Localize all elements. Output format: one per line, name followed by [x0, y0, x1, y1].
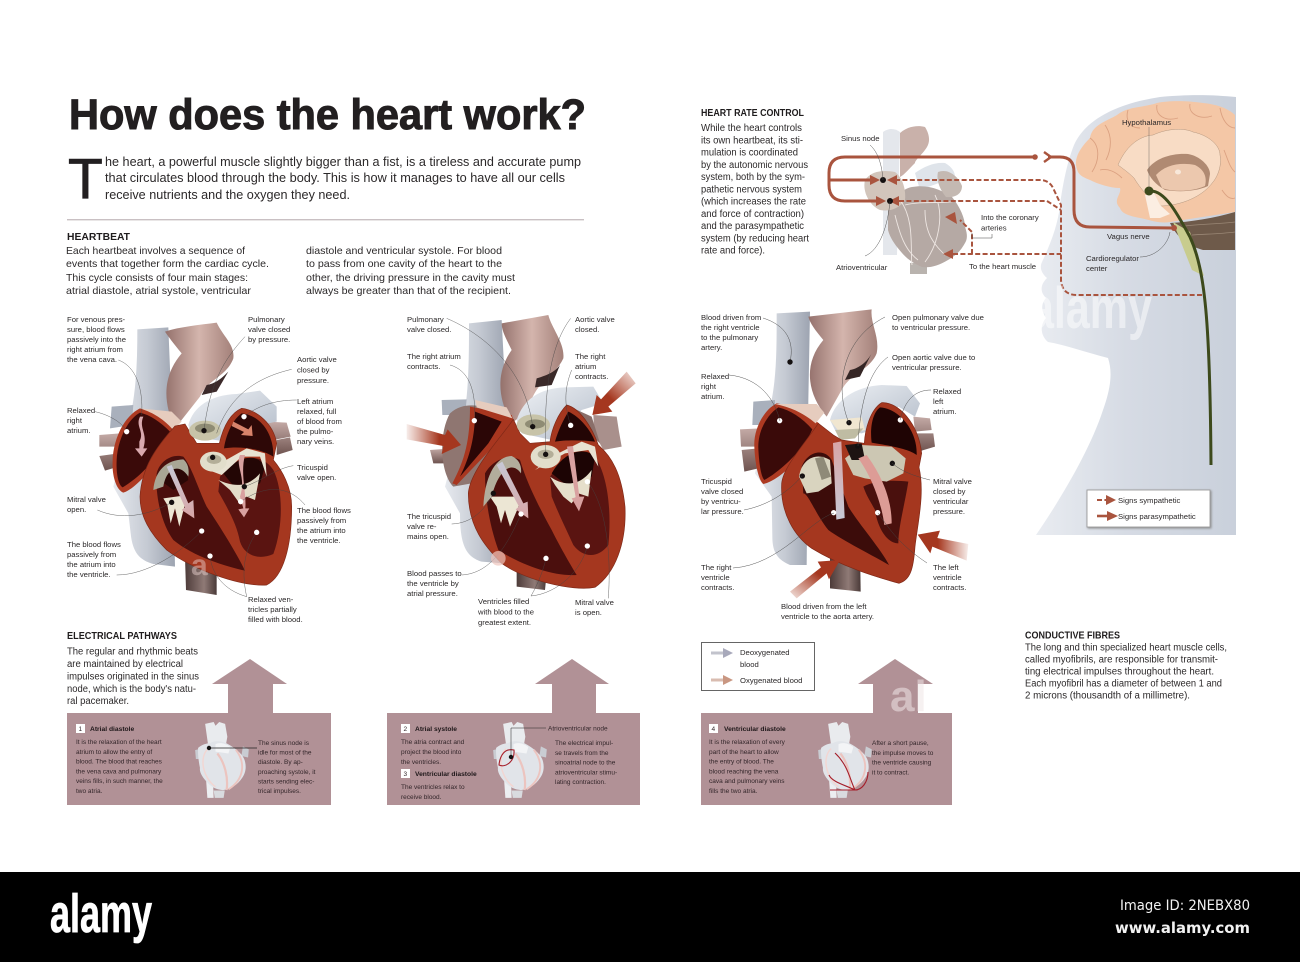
head labels: [1086, 118, 1171, 273]
head labels: Cardioregulator: [1086, 254, 1139, 263]
electrical pathways text: node, which is the body's natu-: [67, 684, 196, 695]
intro text with drop cap: [68, 147, 581, 211]
labels for heart 1: Tricuspid: [297, 463, 328, 472]
legend: nerve signals: Signs sympathetic: [1118, 496, 1181, 505]
heart rate control text: system, both by the sym-: [701, 172, 805, 183]
panel: atrial systole and ventricular diastole: the ventricles.: [401, 759, 441, 766]
panel: atrial diastole: proaching systole, it: [258, 769, 316, 776]
labels for heart 2: Aortic valve: [575, 315, 615, 324]
panel: atrial diastole: blood. The blood that reaches: [76, 759, 163, 766]
legend: nerve signals: [1087, 490, 1210, 527]
labels for heart 2: Pulmonary: [407, 315, 444, 324]
heading: heartbeat: HEARTBEAT: [67, 232, 130, 243]
labels for heart 2: Ventricles filled: [478, 597, 529, 606]
labels for heart 1: right: [67, 416, 83, 425]
labels for heart 2: contracts.: [575, 372, 608, 381]
labels for heart 1: Relaxed ven-: [248, 595, 294, 604]
footer bar: www.alamy.com: [1115, 919, 1250, 937]
labels for heart 1: Relaxed: [67, 406, 95, 415]
intro text with drop cap: he heart, a powerful muscle slightly bigger than a fist, is a tireless and accurate pump: [105, 154, 581, 169]
footer bar: [0, 872, 1300, 962]
electrical pathways text: [67, 646, 199, 707]
panel: atrial diastole: trical impulses.: [258, 788, 301, 795]
panel: ventricular diastole: the entry of blood. The: [709, 759, 774, 766]
legend: blood types: blood: [740, 660, 759, 669]
heart illustration 1: atrial diastole: [95, 323, 305, 597]
labels for heart 3: by ventricu-: [701, 497, 741, 506]
heartbeat text: events that together form the cardiac cycle.: [66, 259, 269, 270]
heart rate control text: pathetic nervous system: [701, 184, 802, 195]
panel: ventricular diastole: blood reaching the vena: [709, 768, 779, 775]
labels for heart 3: Relaxed: [933, 387, 961, 396]
heart rate control text: its own heartbeat, its sti-: [701, 135, 803, 146]
panel: ventricular diastole: al: [890, 672, 927, 721]
heartbeat text: diastole and ventricular systole. For blood: [306, 246, 502, 257]
panel: atrial systole and ventricular diastole: se travels from the: [555, 750, 609, 757]
labels for heart 3: atrium.: [933, 407, 956, 416]
labels for heart 1: Left atrium: [297, 397, 333, 406]
panel: atrial diastole: two atria.: [76, 788, 103, 795]
labels for heart 2: [407, 315, 615, 627]
cerebellum: [1170, 212, 1235, 250]
labels for heart 1: The blood flows: [67, 540, 121, 549]
panel: ventricular diastole: Ventricular diastole: [724, 726, 786, 733]
labels for heart 2: with blood to the: [477, 607, 534, 616]
labels for heart 2: contracts.: [407, 362, 440, 371]
heading: electrical pathways: ELECTRICAL PATHWAYS: [67, 631, 177, 642]
heartbeat text: to pass from one cavity of the heart to the: [306, 259, 502, 270]
small heart labels: arteries: [981, 224, 1007, 232]
labels for heart 3: right: [701, 382, 717, 391]
labels for heart 1: open.: [67, 505, 86, 514]
heartbeat text: atrial diastole, atrial systole, ventricular: [66, 286, 252, 297]
labels for heart 1: passively from: [67, 550, 116, 559]
labels for heart 3: contracts.: [701, 583, 734, 592]
panel: ventricular diastole: the impulse moves to: [872, 750, 934, 757]
labels for heart 3: [701, 313, 984, 621]
mini heart: ventricles: [818, 722, 872, 798]
nerve signal lines and node markers: [829, 152, 1204, 295]
labels for heart 3: Blood driven from: [701, 313, 761, 322]
brain: [1076, 101, 1235, 223]
heart rate control text: by the autonomic nervous: [701, 160, 808, 171]
conductive fibres text: called myofibrils, are responsible for transmit-: [1025, 654, 1218, 666]
heart rate control text: rate and force).: [701, 246, 765, 256]
panel: atrial diastole: atrium to allow the entry of: [76, 749, 152, 756]
panel: atrial systole and ventricular diastole: The ventricles relax to: [401, 784, 465, 791]
heartbeat text: This cycle consists of four main stages:: [66, 273, 248, 284]
labels for heart 3: contracts.: [933, 583, 966, 592]
labels for heart 1: filled with blood.: [248, 615, 303, 624]
panel: atrial diastole: diastole. By ap-: [258, 759, 303, 766]
labels for heart 1: Mitral valve: [67, 495, 106, 504]
panel: atrial diastole: [67, 659, 331, 805]
labels for heart 1: pressure.: [297, 376, 329, 385]
labels for heart 1: of blood from: [297, 417, 342, 426]
number 1: 1: [78, 726, 82, 733]
labels for heart 2: atrium: [575, 362, 596, 371]
panel: atrial systole and ventricular diastole: Atrioventricular node: [548, 726, 608, 732]
watermark over head: alamy: [1030, 276, 1152, 341]
panel: ventricular diastole: After a short pause,: [872, 740, 929, 747]
labels for heart 3: artery.: [701, 343, 722, 352]
panel: ventricular diastole: cava and pulmonary veins: [709, 778, 785, 785]
labels for heart 3: ventricle: [701, 573, 730, 582]
panel: atrial systole and ventricular diastole: sinoatrial node to the: [555, 760, 616, 767]
panel: ventricular diastole: 4: [712, 726, 716, 733]
labels for heart 2: The right: [575, 352, 606, 361]
mini heart: atrioventricular node: [493, 722, 547, 798]
electrical pathways text: are maintained by electrical: [67, 659, 183, 670]
heartbeat text: always be greater than that of the recipient.: [306, 286, 511, 297]
labels for heart 1: valve open.: [297, 473, 336, 482]
labels for heart 1: Pulmonary: [248, 315, 285, 324]
labels for heart 3: valve closed: [701, 487, 743, 496]
panel: atrial diastole: It is the relaxation of the heart: [76, 739, 162, 746]
small heart labels: To the heart muscle: [969, 262, 1036, 271]
labels for heart 1: right atrium from: [67, 345, 123, 354]
labels for heart 3: Mitral valve: [933, 477, 972, 486]
panel: atrial diastole: The sinus node is: [258, 740, 310, 747]
labels for heart 2: closed.: [575, 325, 599, 334]
electrical pathways text: The regular and rhythmic beats: [67, 646, 198, 658]
labels for heart 1: by pressure.: [248, 335, 290, 344]
panel: atrial diastole: Atrial diastole: [90, 726, 135, 733]
labels for heart 1: the vena cava.: [67, 355, 117, 364]
leader lines for heart 3: [729, 317, 931, 568]
panel: ventricular diastole: part of the heart to allow: [709, 749, 779, 756]
mini heart: sinus node: [195, 722, 249, 798]
conductive fibres text: [1025, 642, 1227, 702]
conductive fibres text: ting electrical impulses throughout the heart.: [1025, 666, 1214, 678]
labels for heart 2: atrial pressure.: [407, 589, 458, 598]
labels for heart 1: passively into the: [67, 335, 126, 344]
panel: atrial systole and ventricular diastole: Atrial systole: [415, 726, 457, 733]
legend: blood types: Oxygenated blood: [740, 676, 802, 685]
labels for heart 3: pressure.: [933, 507, 965, 516]
labels for heart 3: atrium.: [701, 392, 724, 401]
panel: ventricular diastole: It is the relaxation of every: [709, 739, 786, 746]
panel: atrial diastole: starts sending elec-: [258, 778, 314, 785]
labels for heart 3: Open pulmonary valve due: [892, 313, 984, 322]
heartbeat text: other, the driving pressure in the cavity must: [306, 273, 515, 284]
panel: atrial diastole: veins fills, in such manner, the: [76, 778, 163, 785]
panel: atrial systole and ventricular diastole: receive blood.: [401, 794, 442, 801]
labels for heart 3: to ventricular pressure.: [892, 323, 970, 332]
heading: conductive fibres: CONDUCTIVE FIBRES: [1025, 630, 1120, 642]
heart rate control text: (which increases the rate: [701, 196, 806, 208]
labels for heart 1: the ventricle.: [67, 570, 111, 579]
panel: atrial systole and ventricular diastole: 2: [404, 726, 408, 733]
panel: atrial systole and ventricular diastole: Ventricular diastole: [415, 771, 477, 778]
labels for heart 1: the atrium into: [67, 560, 116, 569]
labels for heart 2: the ventricle by: [407, 579, 459, 588]
labels for heart 3: the right ventricle: [701, 323, 760, 332]
head labels: Hypothalamus: [1122, 118, 1171, 127]
electrical pathways text: ral pacemaker.: [67, 696, 129, 707]
panel: atrial systole and ventricular diastole: [387, 659, 640, 805]
labels for heart 1: passively from: [297, 516, 346, 525]
number 1: [76, 724, 85, 733]
panel: ventricular diastole: fills the two atria.: [709, 788, 758, 795]
labels for heart 2: The tricuspid: [407, 512, 451, 521]
labels for heart 3: ventricular pressure.: [892, 363, 962, 372]
panel: atrial systole and ventricular diastole: 3: [404, 771, 408, 778]
labels for heart 1: tricles partially: [248, 605, 297, 614]
panel: atrial systole and ventricular diastole: project the blood into: [401, 749, 462, 756]
heart rate control text: system (by reducing heart: [701, 233, 809, 244]
labels for heart 1: sure, blood flows: [67, 325, 125, 334]
heartbeat text: Each heartbeat involves a sequence of: [66, 246, 245, 257]
panel: atrial systole and ventricular diastole: lating contraction.: [555, 779, 606, 786]
labels for heart 1: For venous pres-: [67, 315, 126, 324]
panel: atrial systole and ventricular diastole: The electrical impul-: [555, 740, 613, 747]
labels for heart 2: Blood passes to: [407, 569, 462, 578]
heartbeat text: [66, 246, 515, 297]
labels for heart 2: mains open.: [407, 532, 449, 541]
intro text with drop cap: that circulates blood through the body. This is how it manages to have all our cells: [105, 170, 565, 185]
labels for heart 1: The blood flows: [297, 506, 351, 515]
panel: atrial diastole: the vena cava and pulmonary: [76, 768, 162, 775]
watermark in heart 1: a: [191, 549, 208, 582]
labels for heart 1: relaxed, full: [297, 407, 337, 416]
small heart labels: Atrioventricular: [836, 263, 888, 272]
title: How does the heart work?: [69, 91, 586, 139]
labels for heart 2: Mitral valve: [575, 598, 614, 607]
labels for heart 3: closed by: [933, 487, 966, 496]
footer bar: Image ID: 2NEBX80: [1120, 898, 1250, 914]
panel: atrial systole and ventricular diastole: atrioventricular stimu-: [555, 769, 617, 776]
labels for heart 3: ventricular: [933, 497, 969, 506]
footer bar: alamy: [50, 884, 152, 944]
panel: atrial systole and ventricular diastole: The atria contract and: [401, 739, 465, 746]
small heart for heart rate control: [864, 126, 967, 274]
panel: ventricular diastole: it to contract.: [872, 769, 909, 776]
labels for heart 1: the ventricle.: [297, 536, 341, 545]
labels for heart 3: The left: [933, 563, 960, 572]
panel: ventricular diastole: the ventricle causing: [872, 760, 932, 767]
labels for heart 1: closed by: [297, 365, 330, 374]
conductive fibres text: Each myofibril has a diameter of between 1 and: [1025, 678, 1222, 690]
intro text with drop cap: T: [68, 147, 103, 211]
labels for heart 3: ventricle: [933, 573, 962, 582]
conductive fibres text: 2 microns (thousandth of a millimetre).: [1025, 690, 1190, 702]
small heart labels: Into the coronary: [981, 213, 1039, 222]
labels for heart 3: The right: [701, 563, 732, 572]
head silhouette with brain: [1036, 95, 1236, 535]
labels for heart 1: atrium.: [67, 426, 90, 435]
panel: ventricular diastole: [701, 659, 952, 805]
labels for heart 2: is open.: [575, 608, 602, 617]
heart rate control text: and the parasympathetic: [701, 221, 804, 232]
heart rate control text: and force of contraction): [701, 209, 804, 220]
legend: blood types: [702, 642, 814, 690]
labels for heart 1: nary veins.: [297, 437, 334, 446]
panel: atrial diastole: idle for most of the: [258, 750, 312, 757]
labels for heart 3: ventricle to the aorta artery.: [781, 612, 874, 621]
legend: blood types: Deoxygenated: [740, 648, 790, 657]
head labels: Vagus nerve: [1107, 232, 1150, 241]
labels for heart 2: greatest extent.: [478, 618, 531, 627]
conductive fibres text: The long and thin specialized heart muscle cells,: [1025, 642, 1227, 654]
labels for heart 3: left: [933, 397, 944, 406]
labels for heart 3: lar pressure.: [701, 507, 744, 516]
labels for heart 1: the atrium into: [297, 526, 346, 535]
heart illustration 2: atrial systole: [407, 315, 636, 598]
labels for heart 3: Blood driven from the left: [781, 602, 867, 611]
labels for heart 1: Aortic valve: [297, 355, 337, 364]
small heart labels: [836, 134, 1039, 272]
vagus nerve: [1150, 191, 1211, 465]
labels for heart 1: the pulmo-: [297, 427, 334, 436]
labels for heart 3: Relaxed: [701, 372, 729, 381]
head labels: center: [1086, 264, 1108, 273]
electrical pathways text: impulses originated in the sinus: [67, 672, 199, 682]
legend: nerve signals: Signs parasympathetic: [1118, 512, 1196, 521]
labels for heart 2: The right atrium: [407, 352, 461, 361]
labels for heart 3: to the pulmonary: [701, 333, 758, 342]
small heart labels: Sinus node: [841, 134, 879, 143]
labels for heart 1: [67, 315, 351, 624]
intro text with drop cap: receive nutrients and the oxygen they need.: [105, 187, 350, 202]
heading: heart rate control: HEART RATE CONTROL: [701, 108, 804, 119]
labels for heart 2: valve re-: [407, 522, 437, 531]
labels for heart 3: Tricuspid: [701, 477, 732, 486]
labels for heart 2: valve closed.: [407, 325, 451, 334]
labels for heart 3: Open aortic valve due to: [892, 353, 975, 362]
heart rate control text: mulation is coordinated: [701, 148, 798, 158]
heart illustration 3: ventricular systole: [740, 309, 968, 598]
heart rate control text: [701, 123, 809, 256]
labels for heart 1: valve closed: [248, 325, 290, 334]
heart rate control text: While the heart controls: [701, 123, 802, 134]
